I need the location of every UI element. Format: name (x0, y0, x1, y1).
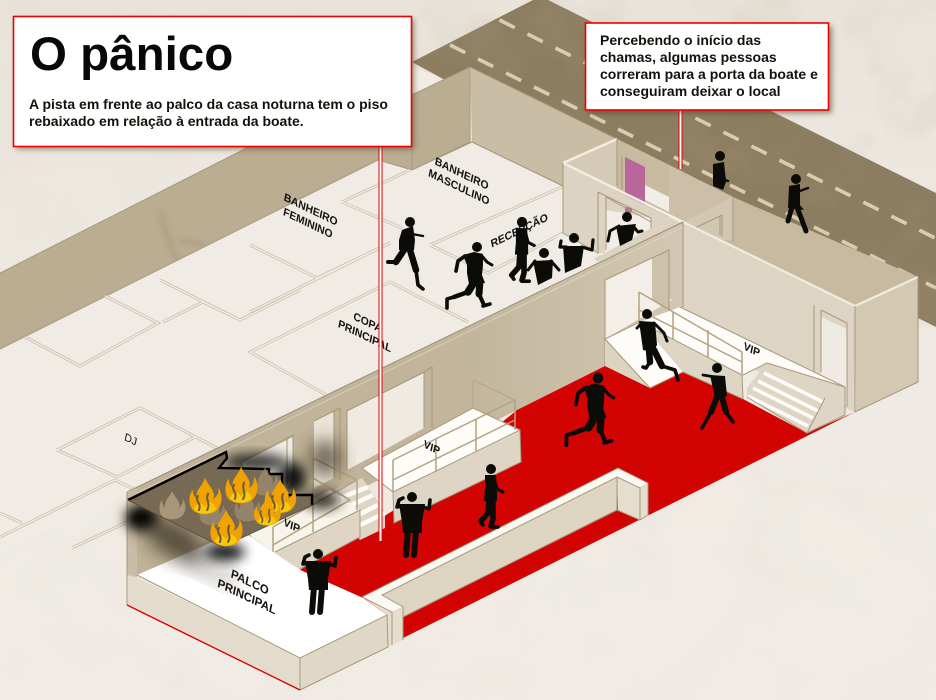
stage label: PRINCIPAL (216, 576, 277, 617)
VIP platform centre, with railing (362, 380, 521, 523)
leader line from title box (378, 146, 382, 541)
VIP platform right, with ramp, railing and stairs (605, 292, 845, 433)
person: arms raised on red floor (397, 492, 430, 555)
room label: Copa principal: PRINCIPAL (337, 318, 393, 355)
room label: Banheiro masculino: BANHEIRO (434, 155, 490, 193)
person: runner near Banheiro (388, 217, 423, 289)
room label: Recepção: RECEPÇÃO (490, 210, 549, 251)
room label: Banheiro feminino: FEMININO (282, 206, 334, 242)
stairs beside the centre platform (335, 478, 385, 540)
callout: people escaping: chamas, algumas pessoas (600, 49, 777, 65)
person: runner (447, 242, 492, 308)
person: arms raised at the wall (560, 233, 593, 273)
room label: Banheiro masculino: MASCULINO (427, 167, 491, 208)
entrance room with pink door (500, 139, 733, 285)
room label: Banheiro feminino (280, 191, 339, 243)
far wall, right of the corner (470, 67, 617, 186)
VIP label centre: VIP (422, 438, 441, 458)
person: running down the ramp (637, 309, 678, 380)
white wedge between road and far wall (412, 66, 445, 97)
soot and smoke (125, 440, 341, 592)
VIP label right: VIP (742, 340, 761, 360)
low partition wall on the dance floor (362, 468, 648, 647)
callout: people escaping: conseguiram deixar o local (600, 83, 781, 99)
person: standing near Recepção (511, 217, 534, 281)
callout: people escaping (586, 23, 832, 113)
person: running on the street (788, 174, 808, 231)
callout: people escaping: Percebendo o início das (600, 32, 761, 48)
red dance floor (300, 366, 855, 645)
upper floor plan: room outlines (0, 142, 683, 552)
person: torso at the wall (528, 248, 559, 285)
person: running on red floor, left (566, 372, 614, 445)
room label: DJ: DJ (123, 431, 138, 449)
room label: Copa principal: COPA (352, 310, 383, 336)
main central wall (127, 222, 683, 580)
callout: people escaping: correram para a porta da boate e (600, 66, 818, 82)
person: leaving through entrance (608, 212, 642, 246)
intro text: rebaixado em relação à entrada da boate. (29, 113, 304, 129)
heading: O pânico (30, 28, 233, 81)
leader line from entrance callout (678, 110, 682, 169)
VIP label left: VIP (282, 516, 301, 536)
stage label: PALCO (230, 566, 270, 598)
person: running on red floor, right (702, 363, 733, 428)
room label: Banheiro feminino: BANHEIRO (283, 191, 339, 229)
person: walking on the street (713, 151, 728, 190)
intro text: A pista em frente ao palco da casa noturna tem o piso (29, 96, 388, 112)
VIP platform left, with railing (246, 458, 360, 569)
main stage (127, 488, 388, 690)
right block: back of wall, end wall (683, 197, 918, 412)
title box (14, 16, 414, 149)
room label: Copa principal (337, 304, 396, 355)
flames on the slab (160, 467, 296, 546)
burning ceiling slab (128, 452, 312, 547)
road with lane markings (412, 0, 936, 327)
person: arms raised on stage (303, 549, 336, 612)
far wall, left band (0, 67, 470, 349)
person: walking on red floor (480, 464, 503, 527)
